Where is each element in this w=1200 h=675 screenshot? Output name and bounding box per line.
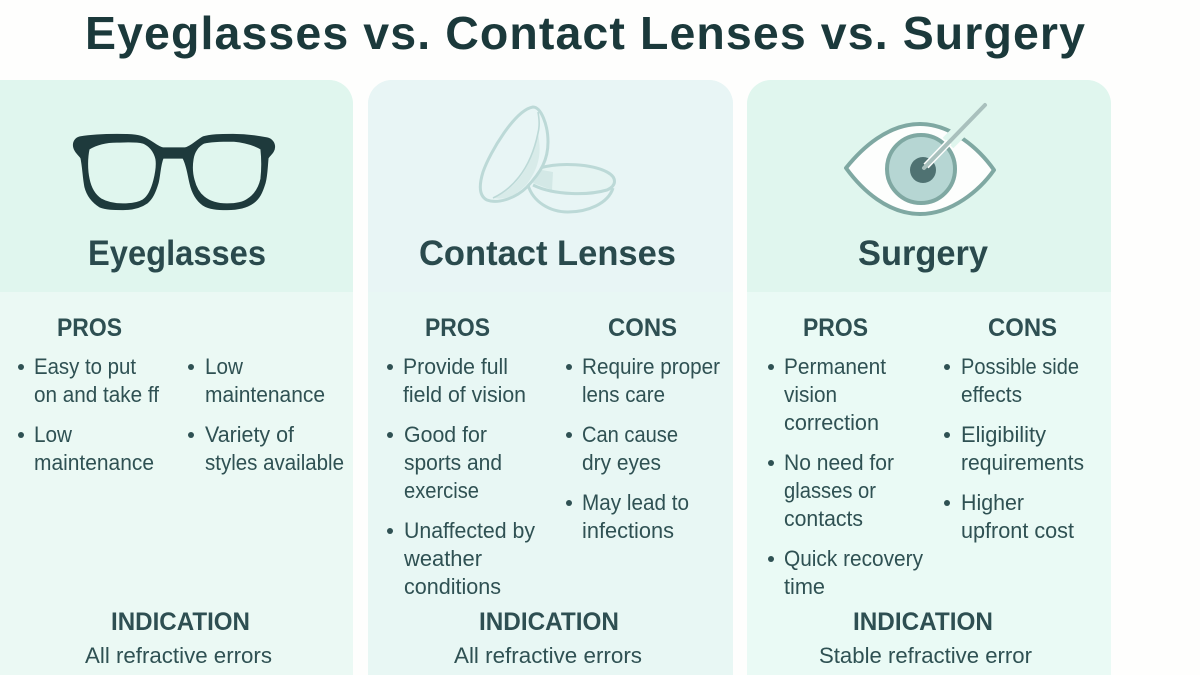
cons list: effects	[961, 382, 1022, 407]
pros list: Easy to put	[34, 354, 137, 379]
pros list: time	[784, 574, 825, 599]
pros list: Quick recovery	[784, 546, 924, 571]
cons list: upfront cost	[961, 518, 1075, 543]
pros list: Provide full	[403, 354, 508, 379]
pros list: on and take ff	[34, 382, 160, 407]
indication	[85, 608, 272, 668]
cons list: Possible side	[961, 354, 1079, 379]
cons list: Require proper	[582, 354, 720, 379]
icon: eye with surgical tool	[846, 105, 994, 214]
pros list: Variety of	[205, 422, 295, 447]
cons list: infections	[582, 518, 674, 543]
pros list: Permanent	[784, 354, 887, 379]
pros list: sports and	[404, 450, 502, 475]
indication: All refractive errors	[85, 643, 272, 668]
pros list	[768, 354, 924, 599]
pros list: vision	[784, 382, 837, 407]
pros list: correction	[784, 410, 879, 435]
pros list: conditions	[404, 574, 501, 599]
title: Eyeglasses vs. Contact Lenses vs. Surgery	[85, 7, 1085, 59]
cons list: May lead to	[582, 490, 689, 515]
pros list: weather	[403, 546, 482, 571]
pros list: Good for	[404, 422, 487, 447]
heading: contact lenses: Contact Lenses	[419, 234, 676, 273]
cons list: requirements	[961, 450, 1084, 475]
pros list: maintenance	[34, 450, 154, 475]
indication	[819, 608, 1032, 668]
pros list: Low	[205, 354, 244, 379]
pros list: Unaffected by	[404, 518, 536, 543]
pros list: exercise	[404, 478, 479, 503]
cons list: Higher	[961, 490, 1024, 515]
indication	[454, 608, 642, 668]
pros heading: PROS	[57, 314, 122, 342]
cons list: dry eyes	[582, 450, 661, 475]
cons list: lens care	[582, 382, 665, 407]
indication: INDICATION	[111, 608, 250, 636]
pros list: glasses or	[784, 478, 876, 503]
panel: surgery	[747, 80, 1111, 675]
pros list	[18, 354, 344, 475]
pros heading: PROS	[425, 314, 490, 342]
cons list	[566, 354, 720, 543]
indication: All refractive errors	[454, 643, 642, 668]
cons list: Can cause	[582, 422, 678, 447]
heading: eyeglasses: Eyeglasses	[88, 234, 266, 273]
pros heading: PROS	[803, 314, 868, 342]
cons list	[944, 354, 1084, 543]
indication: INDICATION	[479, 608, 619, 636]
pros list: Low	[34, 422, 73, 447]
cons list: Eligibility	[961, 422, 1047, 447]
pros list: No need for	[784, 450, 894, 475]
indication: INDICATION	[853, 608, 993, 636]
pros list: maintenance	[205, 382, 325, 407]
panel: eyeglasses	[0, 80, 353, 675]
panel: contact lenses	[368, 80, 733, 675]
pros list: styles available	[205, 450, 344, 475]
cons heading: CONS	[988, 314, 1057, 342]
heading: surgery: Surgery	[858, 234, 989, 273]
indication: Stable refractive error	[819, 643, 1032, 668]
pros list	[387, 354, 536, 599]
icon: eyeglasses	[74, 134, 274, 210]
cons heading: CONS	[608, 314, 677, 342]
pros list: field of vision	[403, 382, 526, 407]
pros list: contacts	[784, 506, 863, 531]
icon: contact lenses	[480, 107, 615, 212]
